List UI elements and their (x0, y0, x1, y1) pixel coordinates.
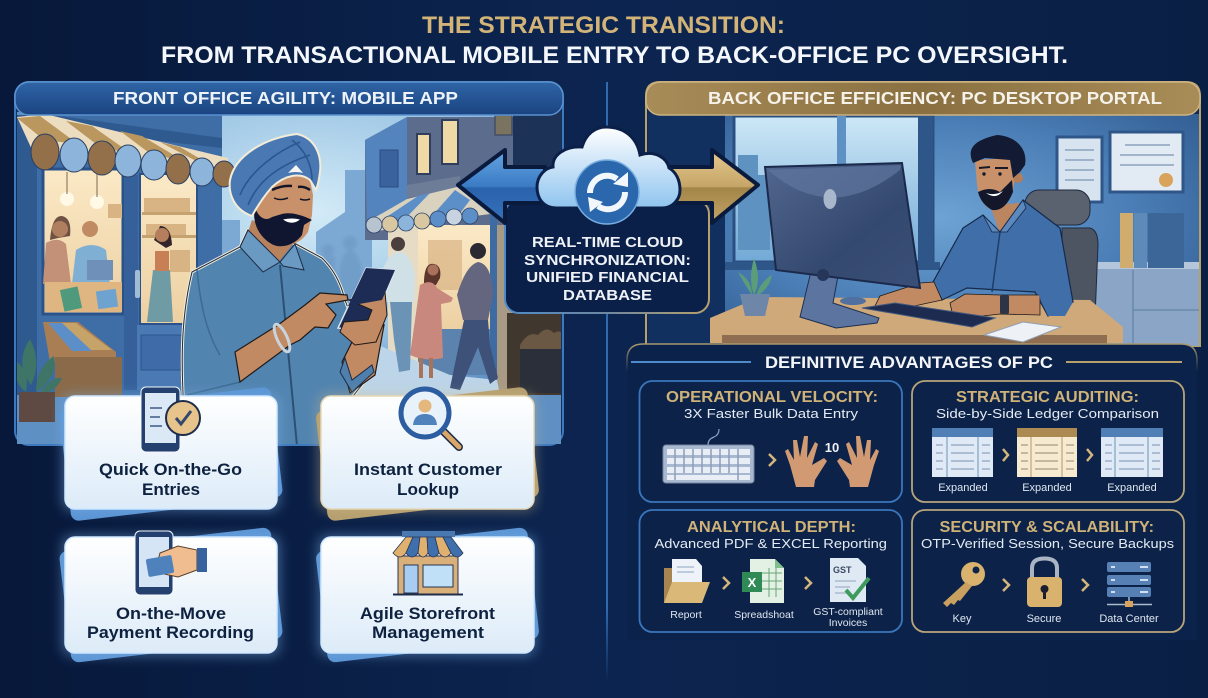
security labels: Data Center (1099, 613, 1159, 625)
callout: real-time cloud synchronization (505, 200, 709, 313)
chevron (1087, 449, 1092, 461)
desktop monitor with stand (765, 163, 920, 328)
icon: storefront (393, 531, 463, 594)
shopkeeper with turban and phone (182, 134, 395, 446)
ledger labels (938, 482, 1157, 494)
arms (875, 282, 942, 308)
icon: data center server (1107, 562, 1152, 607)
awning (17, 114, 228, 170)
cabinet and binders (1092, 213, 1199, 346)
forearm with hand pointing (235, 293, 348, 382)
icon: key (943, 562, 985, 607)
icon: ledger table two (1017, 428, 1077, 477)
shop interior people (43, 216, 173, 322)
shelves in shop (108, 198, 196, 272)
feature card: quick entries: Quick On-the-Go (99, 460, 242, 479)
icon: keyboard (663, 429, 754, 483)
scene: shop street with shopkeeper (16, 112, 567, 446)
feature card: customer lookup: Lookup (397, 480, 459, 499)
arrow: right gold (670, 150, 758, 223)
security labels (953, 613, 1159, 625)
icon: ledger table three (1101, 428, 1163, 477)
feature card: storefront management (315, 527, 540, 663)
shirt (933, 200, 1073, 316)
hair (971, 135, 1025, 178)
feature card: customer lookup: Instant Customer (354, 460, 502, 479)
panel: definitive advantages of PC (627, 344, 1197, 640)
icon: spreadsheet (742, 559, 784, 603)
desk (710, 297, 1123, 347)
callout: real-time cloud synchronization: DATABASE (563, 288, 652, 304)
feature card: payment recording: Payment Recording (87, 623, 254, 642)
icon: ledger table one (932, 428, 993, 477)
card: security and scalability: OTP-Verified Session, Secure Backups (921, 536, 1175, 551)
header: back office (646, 82, 1200, 115)
keyboard mouse paper (840, 297, 1061, 342)
card: analytical depth: ANALYTICAL DEPTH: (687, 519, 856, 536)
security labels: Secure (1027, 613, 1061, 625)
header: front office (15, 82, 563, 115)
forearm holding phone (342, 325, 384, 393)
card: security and scalability: SECURITY & SCALABILITY: (940, 519, 1154, 536)
card: strategic auditing: STRATEGIC AUDITING: (956, 389, 1139, 406)
icon: phone and clock (141, 387, 200, 452)
office window (725, 116, 940, 270)
display crate (43, 322, 122, 397)
scene: office with desktop computer (710, 114, 1199, 346)
icon: magnifier (401, 389, 459, 447)
title (161, 12, 1068, 69)
card: strategic auditing (912, 381, 1184, 502)
ledger labels: Expanded (938, 482, 988, 494)
icon: ten-finger hands: 10 (825, 440, 839, 455)
turban (230, 134, 320, 216)
neck (992, 203, 1020, 231)
icon: cloud with sync (537, 127, 680, 224)
callout: real-time cloud synchronization: REAL-TIME CLOUD (532, 235, 683, 251)
hanging lamps (60, 172, 104, 209)
icon: spreadsheet: X (748, 575, 757, 590)
card: analytical depth (640, 510, 902, 632)
callout: real-time cloud synchronization: UNIFIED FINANCIAL (526, 270, 689, 286)
chevron (723, 577, 729, 589)
right building (365, 112, 567, 395)
phone (338, 268, 395, 332)
icon: report folder (664, 559, 710, 603)
center divider line (606, 82, 608, 682)
chevron (1003, 449, 1008, 461)
street people (321, 236, 498, 390)
card: analytical depth: Advanced PDF & EXCEL Reporting (654, 536, 887, 551)
icon: ten-finger hands (785, 436, 879, 487)
chevron (769, 454, 775, 466)
feature card: payment recording (59, 527, 283, 663)
feature card: quick entries (59, 386, 283, 522)
card: operational velocity: 3X Faster Bulk Data Entry (684, 406, 859, 421)
fingers on phone (340, 292, 387, 345)
header: front office: FRONT OFFICE AGILITY: MOBILE APP (113, 88, 458, 108)
feature card: storefront management: Agile Storefront (360, 604, 495, 623)
distant buildings (222, 170, 372, 284)
icon: padlock (1027, 558, 1062, 607)
head (254, 176, 313, 245)
panel: front office mobile app (15, 82, 567, 446)
face (975, 158, 1016, 210)
potted plant (738, 258, 772, 316)
shop awning on right (366, 187, 490, 233)
collar (240, 230, 280, 272)
card: security and scalability (912, 510, 1184, 632)
street ground (356, 346, 499, 396)
ledger labels: Expanded (1107, 482, 1157, 494)
card: strategic auditing: Side-by-Side Ledger Comparison (936, 406, 1159, 421)
header: back office: BACK OFFICE EFFICIENCY: PC DESKTOP PORTAL (708, 88, 1162, 108)
panel: back office PC desktop portal (646, 82, 1200, 347)
title: THE STRATEGIC TRANSITION: (422, 12, 785, 39)
potted plant (16, 339, 62, 422)
advantages heading: DEFINITIVE ADVANTAGES OF PC (765, 354, 1053, 372)
shop door panels (137, 325, 182, 390)
file labels: Invoices (829, 617, 867, 629)
callout: real-time cloud synchronization: SYNCHRONIZATION: (524, 253, 691, 269)
neck (248, 220, 293, 261)
left shop building (16, 114, 235, 422)
office worker (875, 135, 1073, 318)
card: operational velocity (640, 381, 902, 502)
feature card: customer lookup (315, 386, 540, 522)
wall certificates (1057, 132, 1183, 202)
arrow: left blue (458, 150, 545, 223)
feature card: quick entries: Entries (142, 480, 200, 499)
chevron (805, 577, 811, 589)
card: operational velocity: OPERATIONAL VELOCITY: (666, 389, 878, 406)
icon: GST invoice: GST (833, 565, 852, 575)
file labels: GST-compliant (813, 606, 883, 618)
title: FROM TRANSACTIONAL MOBILE ENTRY TO BACK-OFFICE PC OVERSIGHT. (161, 42, 1068, 69)
ledger labels: Expanded (1022, 482, 1072, 494)
chevron (1003, 579, 1009, 591)
security labels: Key (953, 613, 972, 625)
feature card: payment recording: On-the-Move (116, 604, 226, 623)
feature card: storefront management: Management (372, 623, 484, 642)
office chair (1025, 190, 1098, 318)
icon: phone with card payment (135, 531, 207, 595)
shirt (182, 230, 372, 446)
file labels (670, 606, 883, 629)
file labels: Report (670, 609, 702, 621)
chevron (1082, 579, 1088, 591)
icon: GST invoice (830, 558, 869, 602)
file labels: Spreadshoat (734, 609, 794, 621)
